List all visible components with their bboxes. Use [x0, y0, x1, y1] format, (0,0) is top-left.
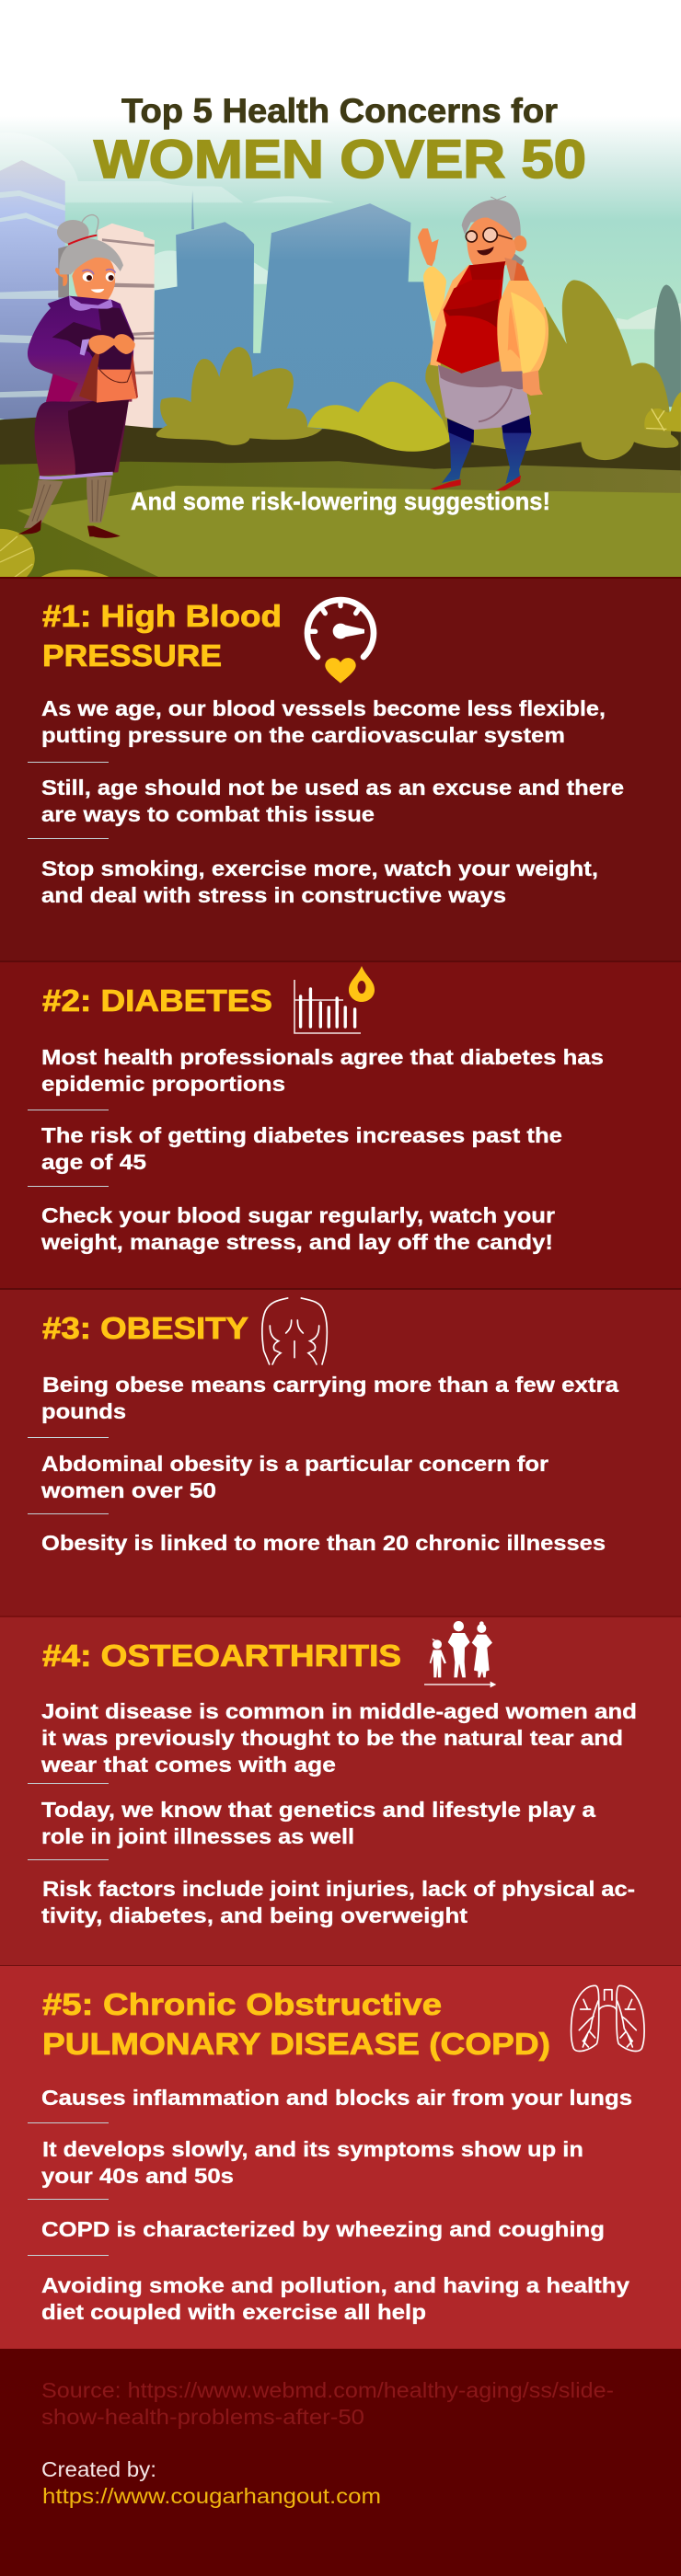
creator credit [41, 2457, 381, 2508]
text block: abdominal obesity [40, 1452, 548, 1502]
heading: COPD: PULMONARY DISEASE (COPD) [42, 2028, 550, 2062]
heading: obesity: #3: OBESITY [42, 1312, 248, 1346]
heading: high blood pressure: PRESSURE [42, 639, 222, 673]
source credit: Source: https://www.webmd.com/healthy-aging/ss/slide- [41, 2378, 614, 2402]
panel: diabetes [0, 960, 681, 1290]
source credit: show-health-problems-after-50 [41, 2405, 364, 2429]
text block: abdominal obesity: women over 50 [40, 1478, 216, 1502]
illustration: waving woman with glasses [418, 196, 548, 490]
text block: inflammation: Causes inflammation and blocks air from your lungs [41, 2086, 632, 2110]
text block: genetics and lifestyle: role in joint illnesses as well [41, 1824, 354, 1848]
text block: blood vessels [41, 696, 606, 747]
panel: osteoarthritis [0, 1616, 681, 1966]
text block: abdominal obesity: Abdominal obesity is a particular concern for [41, 1452, 548, 1476]
heading: high blood pressure: #1: High Blood [42, 600, 282, 634]
text block: obese definition [41, 1373, 618, 1423]
panel: high blood pressure [0, 577, 681, 962]
heading: high blood pressure [42, 600, 282, 673]
source credit [41, 2378, 614, 2429]
text block: joint disease [40, 1699, 637, 1777]
heading: osteoarthritis: #4: OSTEOARTHRITIS [42, 1639, 401, 1673]
text block: epidemic: Most health professionals agree that diabetes has [41, 1045, 604, 1069]
creator credit: Created by: [41, 2457, 156, 2481]
text block: suggestions [40, 1203, 555, 1254]
text block: chronic illnesses: Obesity is linked to more than 20 chronic illnesses [41, 1531, 606, 1555]
title [94, 92, 586, 190]
text block: avoiding smoke: diet coupled with exercise all help [41, 2300, 426, 2324]
panel: obesity [0, 1288, 681, 1617]
text block: develops slowly: your 40s and 50s [41, 2164, 234, 2188]
text block: avoiding smoke [41, 2273, 629, 2324]
text block: risk factors: tivity, diabetes, and being overweight [41, 1903, 467, 1927]
text block: age risk [41, 1123, 562, 1174]
text block: joint disease: it was previously thought to be the natural tear and [41, 1726, 623, 1750]
text block: risk factors [41, 1877, 635, 1927]
text block: joint disease: Joint disease is common in middle-aged women and [41, 1699, 637, 1723]
text block: risk factors: Risk factors include joint injuries, lack of physical ac- [42, 1877, 635, 1901]
text block: age risk: age of 45 [41, 1150, 146, 1174]
text block: avoiding smoke: Avoiding smoke and pollution, and having a healthy [41, 2273, 629, 2297]
background scene: clouds, buildings, bushes and ground [0, 132, 681, 580]
text block: blood vessels: As we age, our blood vessels become less flexible, [41, 696, 606, 720]
text block: suggestions: and deal with stress in constructive ways [41, 883, 506, 907]
text block: not an excuse: are ways to combat this issue [41, 802, 375, 826]
text block: develops slowly: It develops slowly, and its symptoms show up in [42, 2137, 583, 2161]
icon: lungs [571, 1985, 644, 2051]
icon: three figures and arrow [424, 1621, 496, 1687]
text block: suggestions: Stop smoking, exercise more, watch your weight, [41, 857, 598, 880]
text block: age risk: The risk of getting diabetes increases past the [41, 1123, 562, 1147]
text block: develops slowly [41, 2137, 583, 2188]
panel: COPD [0, 1965, 681, 2350]
heading: COPD [42, 1988, 550, 2062]
text block: epidemic [41, 1045, 604, 1096]
text block: genetics and lifestyle [41, 1798, 595, 1848]
text block: suggestions [41, 857, 598, 907]
icon: blood pressure gauge with heart [307, 600, 374, 684]
creator credit: https://www.cougarhangout.com [42, 2484, 381, 2508]
text block: genetics and lifestyle: Today, we know that genetics and lifestyle play a [41, 1798, 595, 1822]
hero illustration panel [0, 0, 681, 580]
illustration: woman with handbag [18, 215, 138, 538]
heading: diabetes: #2: DIABETES [42, 984, 272, 1018]
text block: not an excuse [41, 776, 624, 826]
text block: wheezing: COPD is characterized by wheezing and coughing [41, 2217, 605, 2241]
text block: suggestions: weight, manage stress, and lay off the candy! [40, 1230, 553, 1254]
text block: obese definition: Being obese means carrying more than a few extra [42, 1373, 618, 1397]
text block: epidemic: epidemic proportions [41, 1072, 285, 1096]
panel: footer [0, 2349, 681, 2576]
title: WOMEN OVER 50 [94, 130, 586, 190]
text block: joint disease: wear that comes with age [40, 1753, 336, 1777]
text block: blood vessels: putting pressure on the cardiovascular system [41, 723, 565, 747]
text block: not an excuse: Still, age should not be used as an excuse and there [41, 776, 624, 799]
text block: suggestions: Check your blood sugar regularly, watch your [41, 1203, 555, 1227]
subtitle: And some risk-lowering suggestions! [131, 488, 550, 515]
icon: bar chart with drop [294, 966, 375, 1033]
icon: torso outline [262, 1298, 327, 1364]
title: Top 5 Health Concerns for [121, 92, 558, 130]
heading: COPD: #5: Chronic Obstructive [42, 1988, 442, 2022]
text block: obese definition: pounds [41, 1399, 126, 1423]
